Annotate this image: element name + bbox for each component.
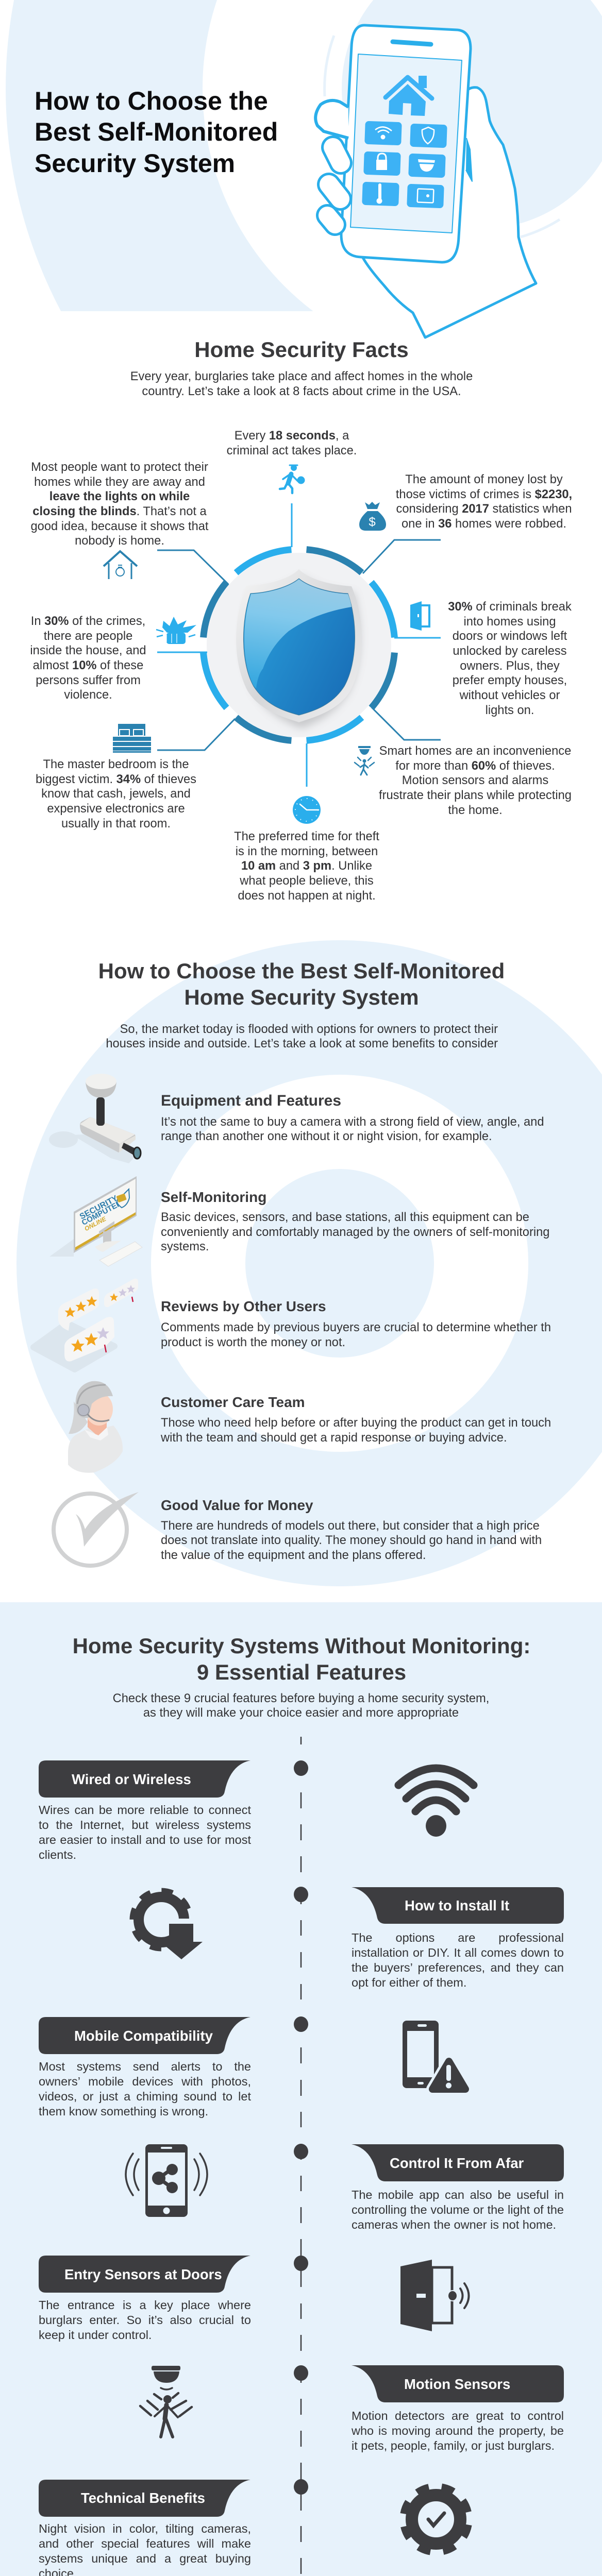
feature: entry sensors	[39, 2256, 251, 2344]
icon: gear with check	[398, 2481, 474, 2557]
icon: running thief	[280, 465, 305, 493]
item: self-monitoring: systems.	[161, 1240, 209, 1253]
hero background rings	[6, 0, 602, 311]
item: equipment and features: It’s not the same to buy a camera with a strong field of view, angle, and	[161, 1115, 544, 1129]
fact: people inside: violence.	[64, 688, 112, 702]
phone body	[341, 25, 471, 262]
banner label: Mobile Compatibility	[74, 2028, 213, 2044]
banner	[352, 2365, 564, 2402]
fact: smart homes: Motion sensors and alarms	[402, 774, 548, 787]
app tile grid	[362, 121, 447, 208]
banner	[39, 2480, 250, 2517]
item: customer care	[160, 1394, 551, 1445]
body text: owners’ mobile devices with photos,	[39, 2075, 251, 2088]
item: customer care: Those who need help before or after buying the product can get in touch	[161, 1416, 551, 1430]
body text: who is moving around the property, be	[352, 2424, 564, 2437]
body text: The entrance is a key place where	[39, 2298, 251, 2312]
tile: safe	[407, 184, 444, 208]
panel: home security facts	[30, 337, 572, 903]
intro text: as they will make your choice easier and more appropriate	[143, 1706, 459, 1720]
phone screen	[350, 54, 462, 233]
banner label: Motion Sensors	[404, 2376, 510, 2392]
icon: open door	[410, 601, 429, 631]
fact: smart homes: for more than 60% of thieves.	[395, 759, 555, 773]
title	[35, 87, 278, 178]
body text: Most systems send alerts to the	[39, 2060, 251, 2073]
icon: door sensor	[400, 2260, 469, 2331]
body text	[352, 2409, 564, 2455]
tile: lock	[363, 151, 401, 176]
body text: them know something is wrong.	[39, 2104, 208, 2117]
fact: doors and windows: unlocked by careless	[453, 645, 567, 658]
shield	[236, 569, 362, 728]
heading: How to Choose the Best Self-Monitored	[98, 959, 505, 983]
item: reviews	[161, 1298, 551, 1349]
body text: Night vision in color, tilting cameras,	[39, 2522, 251, 2535]
fact: master bedroom: expensive electronics are	[47, 802, 185, 816]
intro text	[130, 370, 473, 398]
body text: it pets, people, family, or just burglars.	[352, 2439, 555, 2452]
panel: hero	[6, 0, 602, 339]
body text: clients.	[39, 1848, 76, 1861]
item: good value	[161, 1497, 542, 1562]
banner label: Control It From Afar	[390, 2155, 524, 2171]
item: equipment and features: Equipment and Features	[161, 1092, 341, 1109]
body text	[352, 1930, 564, 1992]
icon: motion sensor person	[140, 2366, 192, 2437]
body text: The options are professional	[352, 1931, 564, 1944]
fact: preferred time: The preferred time for theft	[234, 830, 379, 843]
fact: money lost: considering 2017 statistics when	[396, 502, 572, 516]
fact: smart homes	[379, 744, 572, 817]
item: reviews: Reviews by Other Users	[161, 1298, 326, 1314]
title: Best Self-Monitored	[35, 117, 278, 146]
item: equipment and features: range than another one without it or night vision, for example.	[161, 1130, 492, 1143]
body text: to the Internet, but wireless systems	[39, 1818, 251, 1832]
body text: burglars enter. So it’s also crucial to	[39, 2313, 251, 2327]
finger one	[315, 100, 348, 138]
panel: essential features	[0, 1602, 602, 2576]
body text: cameras when the owner is not home.	[352, 2218, 556, 2231]
item: equipment and features	[161, 1092, 544, 1143]
illustration: security computer: COMPUTER	[80, 1199, 124, 1227]
illustration: security computer: ONLINE	[83, 1215, 108, 1232]
title: How to Choose the	[35, 87, 268, 115]
icon: hand holding phone	[315, 25, 536, 337]
body text: Wires can be more reliable to connect	[39, 1803, 251, 1817]
background rings	[83, 1008, 596, 1519]
intro text: Check these 9 crucial features before buying a home security system,	[113, 1692, 489, 1705]
tile: shield	[410, 124, 447, 148]
fact: people inside: almost 10% of these	[33, 659, 143, 672]
heading: Home Security Systems Without Monitoring:	[73, 1634, 530, 1658]
fact: money lost: one in 36 homes were robbed.	[402, 517, 566, 531]
intro text: So, the market today is flooded with options for owners to protect their	[120, 1023, 498, 1036]
tile: thermometer	[362, 182, 399, 206]
panel: how to choose	[34, 959, 596, 1566]
fact: smart homes: frustrate their plans while protecting	[379, 789, 572, 802]
feature: mobile compatibility	[39, 2017, 251, 2121]
ring segments	[204, 550, 394, 740]
heading	[73, 1634, 530, 1684]
item: good value: the value of the equipment and the plans offered.	[161, 1549, 426, 1562]
icon: house with bulb	[104, 551, 137, 579]
icon: fist impact	[156, 617, 196, 644]
item: self-monitoring: Self-Monitoring	[161, 1189, 266, 1205]
fact: money lost	[396, 473, 572, 531]
body text	[39, 1803, 251, 1865]
fact: preferred time: does not happen at night.	[238, 889, 376, 903]
icon: wifi	[398, 1768, 474, 1837]
illustration: security computer	[49, 1176, 142, 1266]
body text: the buyers’ preferences, and they can	[352, 1961, 564, 1974]
fact: master bedroom: know that cash, jewels, and	[41, 787, 191, 801]
item: good value: does not translate into quality. The money should go hand in hand with	[161, 1534, 542, 1547]
feature: technical benefits	[39, 2480, 251, 2576]
fact: doors and windows	[448, 600, 572, 717]
heading: 9 Essential Features	[197, 1660, 406, 1684]
intro text: houses inside and outside. Let’s take a look at some benefits to consider	[106, 1037, 498, 1050]
fact: top	[227, 429, 357, 457]
icon: vibrating phone	[126, 2144, 207, 2217]
item: good value: There are hundreds of models out there, but consider that a high price	[161, 1519, 540, 1533]
banner label: Wired or Wireless	[72, 1771, 191, 1787]
feature: wired or wireless	[39, 1760, 251, 1865]
fact: leave the lights on	[30, 461, 209, 548]
fact: master bedroom: usually in that room.	[61, 817, 171, 831]
body text	[39, 2521, 251, 2576]
fact: money lost: The amount of money lost by	[405, 473, 563, 486]
icon: money bag: $	[369, 515, 376, 529]
item: self-monitoring: conveniently and comfortably managed by the owners of self-monitoring	[161, 1226, 549, 1239]
icon: money bag	[359, 502, 386, 531]
fact: preferred time: 10 am and 3 pm. Unlike	[241, 859, 372, 873]
body text: keep it under control.	[39, 2328, 152, 2342]
fact: preferred time	[234, 830, 379, 903]
fact: doors and windows: doors or windows left	[453, 630, 567, 643]
title: Security System	[35, 149, 235, 178]
feature: motion sensors	[352, 2365, 564, 2455]
body text: systems unique and a great buying	[39, 2552, 251, 2565]
icon: gear with download arrow	[132, 1891, 203, 1959]
fact: preferred time: what people believe, this	[239, 874, 374, 888]
illustration: security camera	[49, 1074, 141, 1163]
illustration: customer care agent	[68, 1381, 123, 1473]
fact: people inside: persons suffer from	[36, 674, 141, 687]
item: good value: Good Value for Money	[161, 1497, 313, 1513]
finger four	[327, 215, 335, 225]
fact: money lost: those victims of crimes is $2230,	[396, 488, 572, 501]
heading: Home Security Facts	[194, 337, 409, 362]
banner label: Technical Benefits	[81, 2490, 205, 2506]
body text: Motion detectors are great to control	[352, 2409, 564, 2422]
intro text: country. Let’s take a look at 8 facts about crime in the USA.	[142, 385, 461, 398]
intro text	[113, 1692, 489, 1720]
tile: camera	[408, 154, 446, 178]
body text: videos, or just a chiming sound to let	[39, 2090, 251, 2103]
fact: doors and windows: owners. Plus, they	[460, 659, 560, 673]
finger three	[329, 184, 340, 199]
icon: clock	[293, 796, 321, 824]
finger two	[333, 147, 341, 163]
body text: and other special features will make	[39, 2537, 251, 2550]
fact: doors and windows: lights on.	[486, 704, 534, 717]
fact: leave the lights on: nobody is home.	[75, 534, 164, 548]
fact: doors and windows: 30% of criminals break	[448, 600, 572, 614]
heading	[98, 959, 505, 1009]
central disc	[207, 553, 391, 737]
fact: smart homes: the home.	[448, 804, 503, 817]
item: reviews: Comments made by previous buyers are crucial to determine whether th	[161, 1321, 551, 1334]
fact: top: criminal act takes place.	[227, 444, 357, 457]
body text: The mobile app can also be useful in	[352, 2188, 564, 2201]
fact: leave the lights on: Most people want to protect their	[31, 461, 208, 474]
banner	[352, 1887, 564, 1924]
feature: how to install	[352, 1887, 564, 1992]
phone speaker	[393, 42, 431, 44]
fact: leave the lights on: closing the blinds. That’s not a	[32, 505, 207, 518]
item: reviews: product is worth the money or not.	[161, 1336, 345, 1349]
intro text: Every year, burglaries take place and affect homes in the whole	[130, 370, 473, 383]
fact: smart homes: Smart homes are an inconvenience	[379, 744, 571, 758]
illustration: security computer: SECURITY	[78, 1194, 120, 1222]
icon: check mark	[54, 1492, 139, 1566]
fact: leave the lights on: leave the lights on while	[49, 490, 190, 503]
banner label: Entry Sensors at Doors	[64, 2266, 222, 2282]
body text: controlling the volume or the light of the	[352, 2203, 564, 2216]
icon: bed	[113, 724, 151, 753]
timeline	[294, 1737, 308, 2576]
fact: doors and windows: prefer empty houses,	[453, 674, 567, 687]
body text: opt for either of them.	[352, 1975, 466, 1989]
banner label: How to Install It	[405, 1897, 509, 1913]
intro text	[106, 1023, 498, 1050]
banner	[39, 2017, 250, 2054]
heading: Home Security System	[184, 985, 419, 1009]
fact: leave the lights on: good idea, because it shows that	[30, 520, 209, 533]
fact: master bedroom: biggest victim. 34% of thieves	[36, 773, 196, 786]
illustration: review bubbles	[34, 1279, 138, 1369]
fact: leave the lights on: homes while they are away and	[34, 476, 205, 489]
banner	[39, 2256, 250, 2293]
fact: master bedroom	[36, 758, 196, 831]
item: self-monitoring: Basic devices, sensors, and base stations, all this equipment can be	[161, 1211, 529, 1224]
icon: phone alert	[403, 2021, 465, 2089]
item: self-monitoring	[161, 1189, 549, 1253]
icon: motion sensor	[355, 746, 374, 775]
item: customer care: with the team and should get a rapid response or buying advice.	[160, 1431, 507, 1445]
fact: master bedroom: The master bedroom is the	[43, 758, 189, 771]
fact: people inside: there are people	[44, 630, 132, 643]
connector lines	[157, 503, 441, 787]
fact: preferred time: is in the morning, between	[236, 845, 378, 858]
fact: doors and windows: without vehicles or	[459, 689, 560, 702]
section background	[0, 1602, 602, 2576]
body text	[352, 2188, 564, 2234]
banner	[39, 1760, 250, 1798]
fact: people inside: In 30% of the crimes,	[31, 615, 145, 628]
item: customer care: Customer Care Team	[161, 1394, 305, 1410]
body text	[39, 2059, 251, 2121]
body text: installation or DIY. It all comes down to	[352, 1946, 564, 1959]
banner	[352, 2144, 564, 2181]
feature: control from afar	[352, 2144, 564, 2234]
fact: doors and windows: into homes using	[463, 615, 556, 629]
fact: top: Every 18 seconds, a	[235, 429, 349, 443]
fact: people inside	[30, 615, 146, 702]
tile: wifi	[364, 121, 402, 145]
body text: are easier to install and to use for most	[39, 1833, 251, 1846]
body text	[39, 2298, 251, 2344]
fact: people inside: inside the house, and	[30, 644, 146, 657]
icon: app house	[386, 76, 432, 116]
